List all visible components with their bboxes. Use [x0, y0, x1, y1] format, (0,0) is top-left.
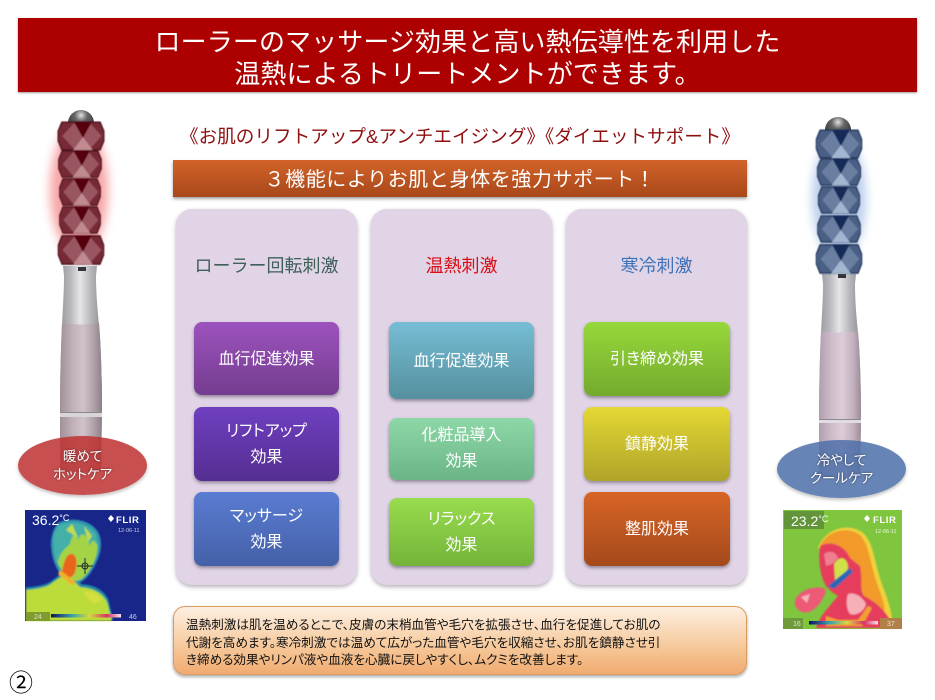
effect: skin conditioning [584, 492, 730, 566]
effect: lift up: 効果 [250, 449, 282, 466]
thermal image: warm: FLIR [116, 515, 140, 526]
effect: massage: 効果 [250, 534, 282, 551]
title banner: 温熱によるトリートメントができます。 [234, 59, 701, 89]
thermal image: warm: 12-06-11 [118, 528, 140, 534]
wand: cool (blue) [812, 117, 866, 478]
thermal image: warm: 46 [129, 614, 137, 621]
orange heading bar: ３機能によりお肌と身体を強力サポート！ [264, 169, 656, 191]
effect: massage: マッサージ [230, 508, 303, 525]
thermal image: warm: 36.2 [32, 512, 59, 528]
effect: blood circulation: 血行促進効果 [413, 352, 510, 370]
effect: tightening: 引き締め効果 [610, 351, 704, 368]
effect: lift up [194, 407, 339, 481]
explanatory note: き締める効果やリンパ液や血液を心臓に戻しやすくし、ムクミを改善します。 [186, 653, 583, 667]
heading: roller: ローラー回転刺激 [194, 256, 338, 276]
explanatory note: 代謝を高めます。寒冷刺激では温めて広がった血管や毛穴を収縮させ、お肌を鎮静させ引 [186, 636, 660, 650]
heading: cold: 寒冷刺激 [620, 256, 692, 276]
effect: relax [389, 498, 534, 566]
thermal image: cool [783, 510, 902, 629]
thermal image: cool: FLIR [873, 515, 897, 526]
effect: blood circulation [389, 322, 534, 399]
effect: cosmetics penetration [389, 418, 534, 480]
oval label: warm care: 暖めて [63, 449, 102, 464]
effect: soothing [584, 407, 730, 481]
effect: massage [194, 492, 339, 566]
thermal image: cool: 12-06-11 [875, 529, 897, 535]
effect: lift up: リフトアップ [226, 423, 307, 440]
oval label: cool care: 冷やして [817, 452, 866, 468]
wand: warm (red) [50, 110, 108, 472]
effect: blood circulation [194, 322, 339, 395]
effect: relax: リラックス [428, 511, 495, 528]
title banner [18, 18, 917, 92]
panel: cold stimulation [566, 209, 747, 585]
oval label: warm care: ホットケア [53, 467, 112, 482]
effect: blood circulation: 血行促進効果 [218, 350, 314, 368]
effect: skin conditioning: 整肌効果 [625, 521, 689, 538]
thermal image: warm: 24 [34, 614, 42, 621]
panel: heat stimulation [371, 209, 552, 585]
effect: cosmetics penetration: 効果 [445, 453, 478, 470]
effect: cosmetics penetration: 化粧品導入 [421, 427, 502, 444]
oval label: cool care: クールケア [810, 470, 873, 486]
oval label: cool care [777, 440, 906, 498]
subtitle: 《お肌のリフトアップ&アンチエイジング》《ダイエットサポート》 [180, 126, 740, 147]
thermal image: warm: °C [59, 513, 70, 523]
explanatory note [173, 606, 747, 675]
thermal image: cool: 37 [887, 621, 895, 628]
thermal image: cool: 23.2 [791, 513, 818, 529]
effect: soothing: 鎮静効果 [625, 436, 689, 453]
oval label: warm care [18, 436, 147, 495]
panel: roller stimulation [176, 209, 357, 585]
heading: heat: 温熱刺激 [426, 256, 498, 276]
thermal image: cool: °C [818, 514, 829, 524]
orange heading bar [173, 160, 747, 197]
explanatory note: 温熱刺激は肌を温めるとこで、皮膚の末梢血管や毛穴を拡張させ、血行を促進してお肌の [186, 618, 660, 632]
page number: ② [9, 670, 33, 697]
effect: tightening [584, 322, 730, 396]
thermal image: cool: 16 [793, 621, 801, 628]
effect: relax: 効果 [445, 537, 478, 554]
title banner: ローラーのマッサージ効果と高い熱伝導性を利用した [155, 27, 780, 57]
thermal image: warm [25, 510, 146, 621]
